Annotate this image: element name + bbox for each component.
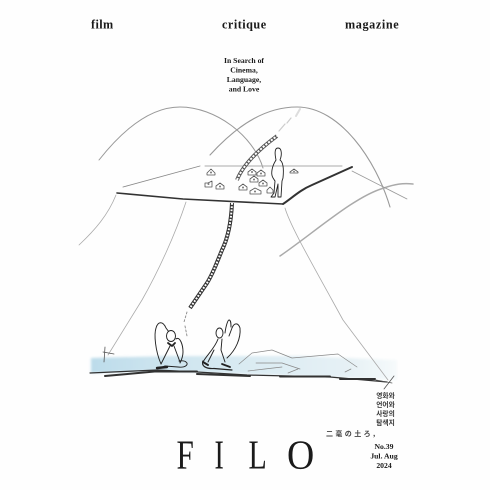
- mountain arcs: [99, 107, 413, 256]
- logo FILO: I: [214, 432, 224, 478]
- tagline: and Love: [229, 84, 260, 93]
- handwritten note: 二毫の土ろ,: [326, 429, 378, 439]
- masthead: magazine: [345, 18, 399, 32]
- tagline: Cinema,: [230, 65, 258, 74]
- left anchor: [103, 347, 114, 362]
- masthead: critique: [222, 18, 267, 32]
- logo FILO: O: [287, 432, 314, 478]
- water: [91, 356, 397, 380]
- left seated angel: [155, 323, 187, 368]
- lower ladder: [184, 203, 232, 336]
- korean subtitle: 영화와: [376, 391, 395, 400]
- issue info: No.39: [374, 442, 394, 451]
- logo FILO: F: [176, 432, 194, 478]
- distant mountains in water: [239, 350, 357, 373]
- floating plane: [117, 166, 352, 204]
- masthead: film: [91, 18, 114, 32]
- ground: [90, 370, 387, 382]
- korean subtitle: 사랑의: [376, 409, 395, 418]
- issue info: Jul. Aug: [370, 452, 398, 460]
- korean subtitle: 탐색지: [376, 418, 395, 427]
- korean subtitle: 언어와: [376, 400, 395, 409]
- masthead: [91, 18, 399, 32]
- tagline: Language,: [227, 75, 261, 84]
- tagline: In Search of: [224, 56, 264, 65]
- logo FILO: [176, 432, 314, 478]
- upper ladder: [237, 109, 300, 180]
- standing person: [271, 148, 283, 197]
- tagline: [224, 56, 264, 93]
- support lines: [79, 195, 388, 380]
- right anchor: [376, 376, 394, 389]
- logo FILO: L: [248, 432, 267, 478]
- issue info: [370, 442, 398, 470]
- illustration: [79, 107, 413, 389]
- houses on plane: [205, 169, 298, 194]
- right seated angel: [203, 320, 240, 370]
- issue info: 2024: [376, 461, 392, 470]
- korean subtitle: [376, 391, 395, 427]
